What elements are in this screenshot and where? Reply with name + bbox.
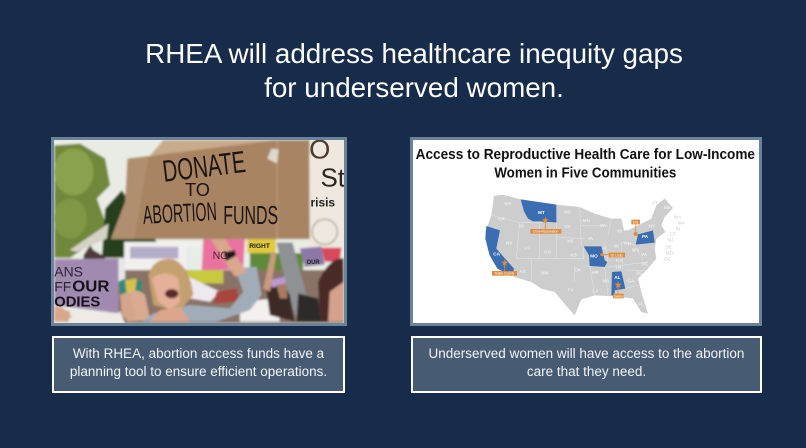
community markers: ★ — [541, 216, 550, 226]
sign text: donate to abortion funds: DONATE — [161, 145, 247, 189]
state abbreviations: VT — [652, 201, 658, 206]
state abbreviations: WV — [632, 248, 640, 253]
state abbreviations: TN — [615, 265, 622, 270]
state abbreviations: SC — [636, 271, 643, 276]
sign text: bans off our bodies: ANS — [54, 263, 83, 279]
state abbreviations: CA — [493, 251, 501, 256]
state abbreviations: MS — [603, 279, 609, 284]
sign text: donate to abortion funds: TO — [185, 179, 210, 200]
state abbreviations: ND — [564, 210, 571, 215]
caption: abortion funds — [52, 336, 345, 393]
sign text: background placards: RIGHT — [249, 243, 270, 250]
state abbreviations: NH — [674, 214, 681, 219]
sign text: bans off our bodies: ODIES — [54, 294, 100, 310]
state abbreviations: MN — [583, 218, 591, 223]
community markers: Tulare County — [494, 272, 515, 276]
state abbreviations: ID — [519, 223, 525, 228]
state abbreviations: NJ — [667, 238, 673, 243]
panel: map slide — [410, 137, 762, 326]
community markers — [492, 216, 640, 298]
state abbreviations: SD — [564, 224, 571, 229]
community markers: Selma — [614, 294, 623, 298]
state abbreviations: PA — [642, 234, 649, 239]
state abbreviations: MI — [617, 229, 622, 234]
state abbreviations: DE — [665, 244, 672, 249]
state abbreviations: DC — [664, 256, 672, 261]
state abbreviations: WI — [600, 223, 606, 228]
sign text: donate to abortion funds — [142, 145, 278, 230]
sign text: donate to abortion funds: FUNDS — [223, 202, 278, 230]
state abbreviations: CO — [544, 250, 552, 255]
state abbreviations: OR — [498, 216, 505, 221]
community markers: ★ — [614, 280, 622, 290]
state abbreviations: OH — [624, 241, 632, 246]
state abbreviations: NC — [642, 261, 649, 266]
panel: protest photo — [51, 137, 347, 326]
sign text: background placards: OUR — [306, 260, 320, 266]
community markers: St. Louis — [611, 253, 623, 257]
state abbreviations: MT — [538, 210, 545, 215]
title: RHEA will address healthcare inequity gaps — [145, 38, 683, 69]
state abbreviations: NM — [541, 271, 548, 276]
sign text: background placards: risis — [310, 196, 335, 210]
state abbreviations: AR — [592, 270, 599, 275]
caption: underserved women — [411, 336, 762, 393]
state abbreviations: VA — [641, 252, 648, 257]
sign text: bans off our bodies: FF — [54, 279, 71, 295]
state abbreviations: AL — [614, 275, 621, 280]
state abbreviations: RI — [676, 226, 680, 231]
state abbreviations: ME — [664, 205, 671, 210]
community markers: Crow Reservation — [533, 230, 558, 234]
caption: underserved women: care that they need. — [527, 364, 646, 379]
state abbreviations: CT — [670, 232, 676, 237]
state abbreviations: GA — [628, 279, 635, 284]
state abbreviations: IL — [603, 245, 608, 250]
state abbreviations: TX — [567, 288, 574, 293]
sign text: bans off our bodies: OUR — [72, 279, 109, 296]
state abbreviations: AZ — [520, 269, 526, 274]
state abbreviations: NV — [506, 241, 513, 246]
state abbreviations: OK — [575, 267, 582, 272]
state abbreviations: UT — [524, 246, 531, 251]
state abbreviations: KS — [570, 252, 577, 257]
state abbreviations: IA — [588, 236, 594, 241]
caption: abortion funds: With RHEA, abortion access funds have a — [73, 346, 324, 361]
state abbreviations: MA — [678, 220, 686, 225]
caption: abortion funds: planning tool to ensure efficient operations. — [70, 364, 327, 379]
title: for underserved women. — [264, 72, 564, 103]
state abbreviations: MD — [666, 250, 674, 255]
community markers: ★ — [500, 258, 509, 268]
map: United States — [485, 195, 673, 315]
map heading: Women in Five Communities — [494, 165, 676, 181]
sign text: background placards: NO — [213, 250, 229, 262]
state abbreviations: WA — [504, 201, 512, 206]
sign text: donate to abortion funds: ABORTION — [142, 198, 218, 230]
sign text: background placards — [213, 134, 346, 266]
state abbreviations: MO — [590, 254, 598, 259]
state abbreviations: LA — [592, 288, 599, 293]
map heading — [416, 147, 755, 181]
sign text: bans off our bodies — [54, 263, 109, 310]
state abbreviations: NY — [649, 224, 656, 229]
caption: underserved women: Underserved women will have access to the abortion — [429, 346, 744, 361]
state abbreviations: NE — [567, 239, 574, 244]
state abbreviations — [493, 201, 686, 306]
state abbreviations: IN — [614, 243, 619, 248]
state abbreviations: KY — [616, 258, 623, 263]
community markers: Erie — [633, 220, 639, 224]
state abbreviations: FL — [638, 301, 644, 306]
title — [145, 38, 683, 103]
